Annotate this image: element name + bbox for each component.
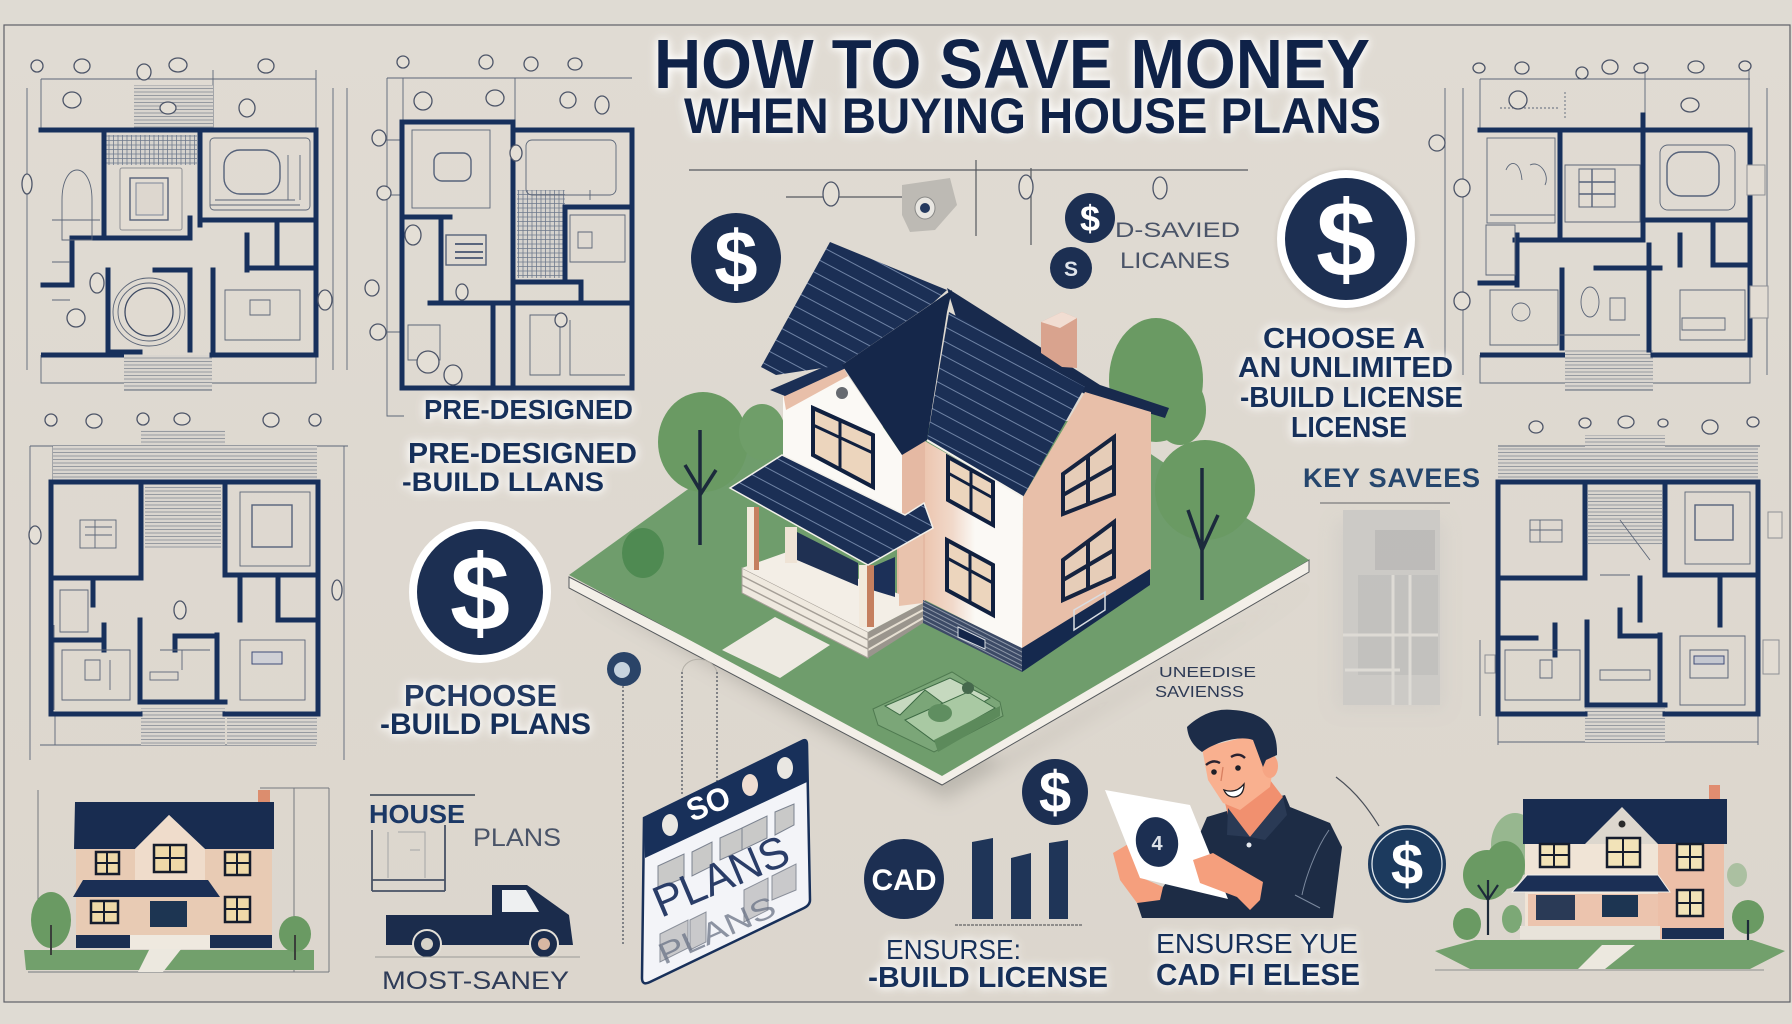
text: ensure your CAD files xyxy=(1156,928,1360,992)
icon: small dollar coin xyxy=(1065,193,1115,243)
roof: left striped slope xyxy=(761,242,947,375)
label: house plans: HOUSE xyxy=(369,799,465,829)
pink strip beside gable xyxy=(897,440,925,606)
text: pre-designed: -BUILD LLANS xyxy=(402,467,604,497)
sketch above delivery truck xyxy=(370,795,475,891)
chimney xyxy=(1041,312,1077,368)
label: house plans xyxy=(369,799,561,852)
roof: right striped slope xyxy=(927,312,1085,497)
porch floor and steps xyxy=(742,552,923,658)
text: choose pre-build plans xyxy=(380,678,591,741)
icon: smaller dollar coin xyxy=(1050,247,1092,289)
porch side pink xyxy=(899,528,923,606)
pointer to coin xyxy=(1336,777,1379,826)
roof: dark gable face xyxy=(842,290,952,455)
cash pile xyxy=(873,672,1003,752)
small house: bottom right xyxy=(1435,785,1785,970)
text: pre-designed: PRE-DESIGNED xyxy=(408,438,637,470)
icon: large dollar coin upper right: $ xyxy=(1316,178,1376,299)
text: choose pre-build plans: PCHOOSE xyxy=(404,678,557,713)
front wall with pink to white transition xyxy=(923,440,1023,649)
icon: large dollar coin upper right xyxy=(1276,169,1418,311)
collar xyxy=(1227,797,1287,840)
label: house plans: PLANS xyxy=(473,824,561,852)
label: d-saved licenses xyxy=(1115,219,1240,273)
card: house plans catalogue: PLANS xyxy=(653,890,781,971)
text: ensure your CAD files: CAD FI ELESE xyxy=(1156,957,1360,992)
label: d-saved licenses: D-SAVIED xyxy=(1115,219,1240,242)
right hand xyxy=(1193,853,1263,910)
icon: CAD badge xyxy=(864,839,944,919)
lawn plate xyxy=(569,420,1309,785)
ghosted building sketch xyxy=(1320,503,1450,710)
text: ensure build license: -BUILD LICENSE xyxy=(868,962,1108,994)
torso xyxy=(1137,795,1342,918)
icon: dollar coin above bars xyxy=(1022,759,1088,825)
left hand behind paper xyxy=(1113,843,1163,903)
upper gable window xyxy=(813,408,873,487)
label: most-savey: MOST-SANEY xyxy=(382,967,569,995)
floor plan: middle left xyxy=(29,413,348,760)
bar chart xyxy=(955,838,1082,925)
person reading a plan xyxy=(1105,710,1342,918)
icon: dollar coin upper left of house xyxy=(691,213,781,303)
text: choose an unlimited-build license: CHOOSE A xyxy=(1263,323,1425,355)
icon: small dollar coin: $ xyxy=(1080,198,1100,239)
porch roof xyxy=(730,455,933,565)
pin with dotted hanging lines xyxy=(607,652,717,945)
label: unneeded savings xyxy=(1155,664,1256,701)
text: ensure build license: ENSURSE: xyxy=(886,934,1021,965)
hair xyxy=(1187,710,1277,767)
icon: dollar coin above bars: $ xyxy=(1039,760,1071,825)
icon: smaller dollar coin: S xyxy=(1064,258,1078,281)
title xyxy=(654,25,1381,144)
card: house plans catalogue: SO xyxy=(681,779,735,828)
label: unneeded savings: SAVIENSS xyxy=(1155,684,1244,701)
neck xyxy=(1225,780,1283,837)
gable white wall xyxy=(783,367,902,516)
title: WHEN BUYING HOUSE PLANS xyxy=(684,88,1381,144)
bush xyxy=(622,528,664,578)
big isometric house on lawn xyxy=(569,242,1320,800)
text: pre-designed: PRE-DESIGNED xyxy=(424,394,633,425)
icon: dollar coin ringed xyxy=(1368,825,1446,903)
floor plan: middle right xyxy=(1480,416,1782,745)
floor plan: top centre-left xyxy=(365,55,632,416)
text: choose pre-build plans: -BUILD PLANS xyxy=(380,708,591,741)
small house: bottom left xyxy=(24,788,329,972)
pink right wall xyxy=(1021,392,1151,649)
technical dimension lines with camera xyxy=(689,160,1248,245)
icon: delivery truck xyxy=(375,885,580,958)
roof back dark xyxy=(947,288,1169,418)
front windows xyxy=(947,457,993,615)
label: unneeded savings: UNEEDISE xyxy=(1159,664,1256,681)
porch dark back wall and door xyxy=(797,532,895,597)
floor plan: top left xyxy=(22,58,347,390)
icon: CAD badge: CAD xyxy=(872,864,936,897)
person reading a plan: 4 xyxy=(1151,833,1163,855)
side windows xyxy=(1063,437,1114,600)
icon: dollar coin upper left of house: $ xyxy=(714,214,758,302)
label: d-saved licenses: LICANES xyxy=(1120,248,1230,273)
icon: dollar coin left: $ xyxy=(450,532,510,653)
card: house plans catalogue: PLANS xyxy=(646,826,797,927)
brick base xyxy=(923,569,1150,672)
back trees xyxy=(658,318,1255,600)
text: choose an unlimited-build license: AN UNLIMITED xyxy=(1238,352,1453,384)
floor plan: top right xyxy=(1429,60,1768,390)
face xyxy=(1202,735,1275,810)
text: choose an unlimited-build license xyxy=(1238,323,1463,444)
text: ensure your CAD files: ENSURSE YUE xyxy=(1156,928,1358,959)
porch columns xyxy=(747,507,874,627)
text: choose an unlimited-build license: LICENSE xyxy=(1291,412,1407,444)
card: house plans catalogue xyxy=(642,740,810,983)
icon: dollar coin ringed: $ xyxy=(1391,832,1423,897)
icon: dollar coin left xyxy=(409,521,551,663)
paper xyxy=(1105,790,1228,899)
eyes and smile xyxy=(1206,755,1245,765)
text: ensure build license xyxy=(868,934,1108,994)
text: choose an unlimited-build license: -BUILD LICENSE xyxy=(1240,382,1463,414)
label: key savers: KEY SAVEES xyxy=(1303,463,1480,493)
text: pre-designed xyxy=(402,394,637,497)
title: HOW TO SAVE MONEY xyxy=(654,25,1370,103)
walkway xyxy=(722,617,830,678)
soft shadow xyxy=(580,580,1320,800)
